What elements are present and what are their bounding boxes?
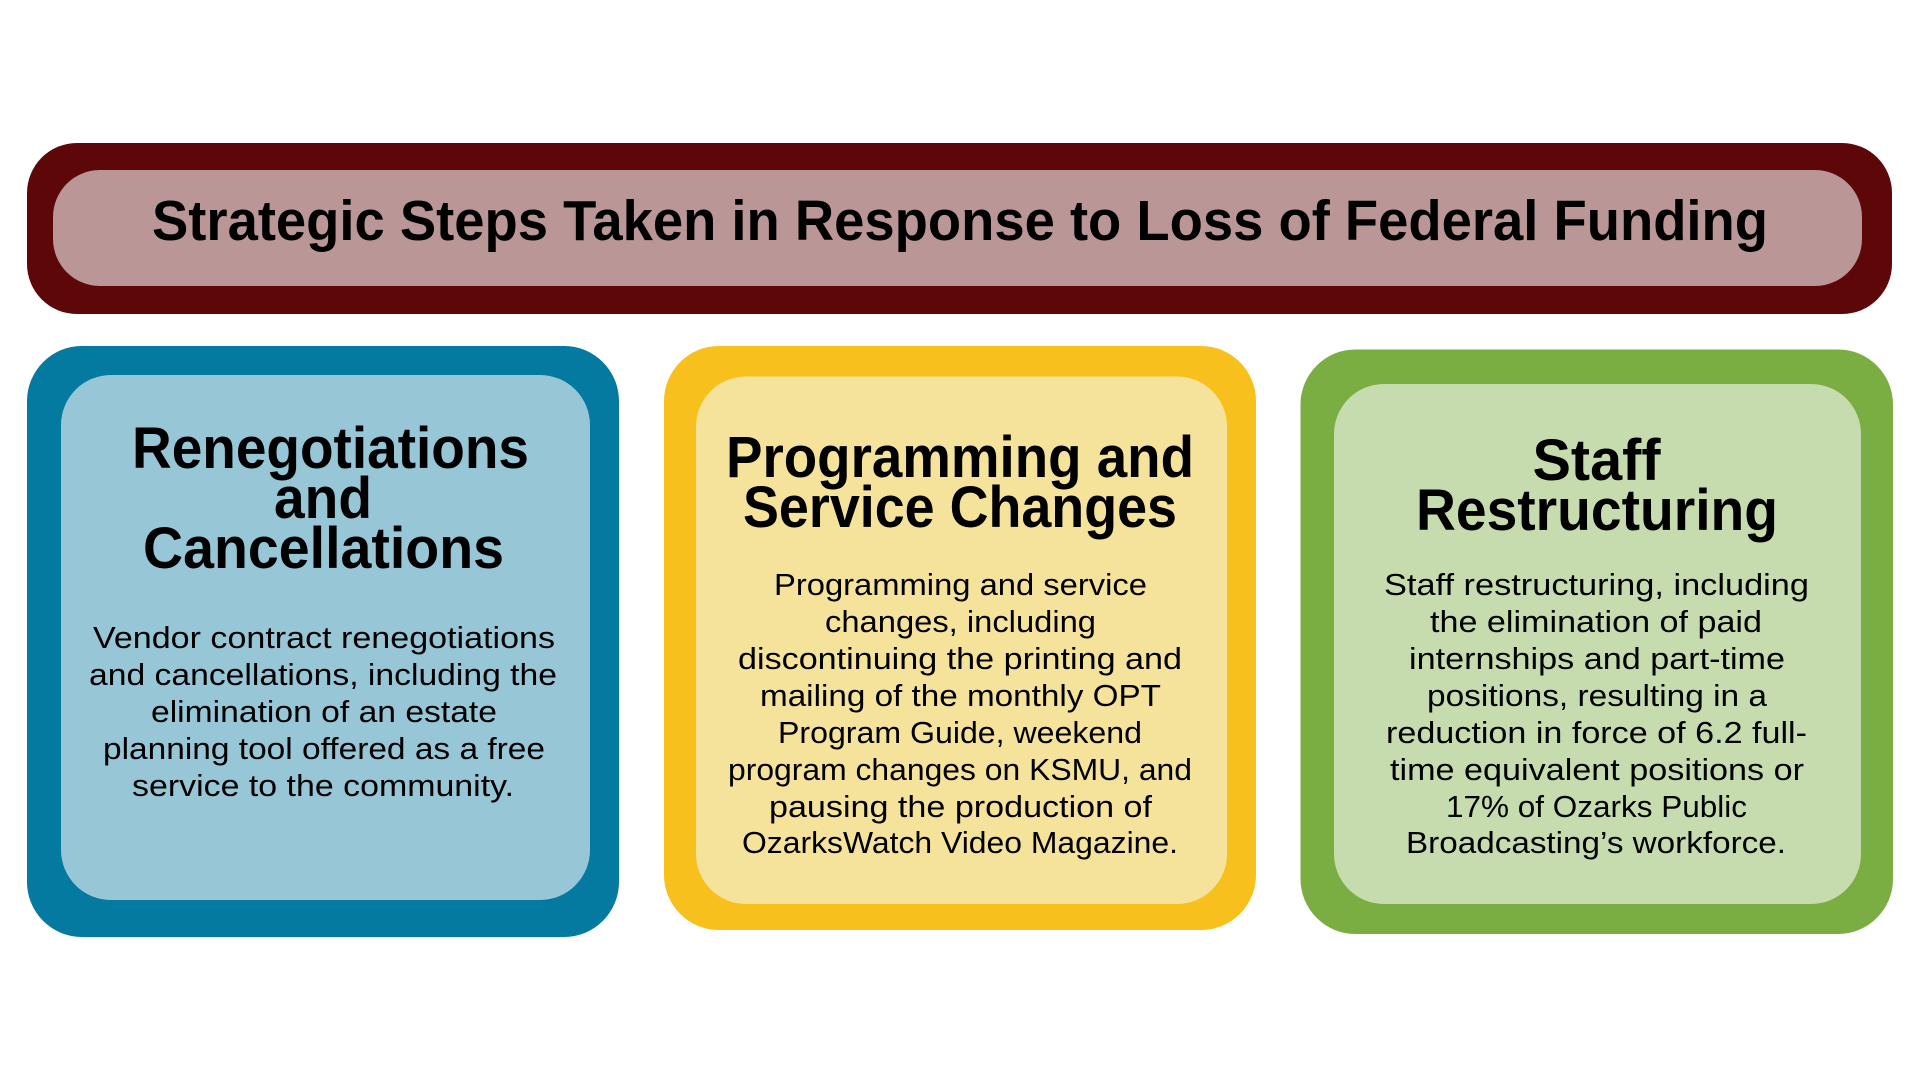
title banner <box>27 143 1892 314</box>
text block: programming changes: Program Guide, weekend <box>778 716 1142 750</box>
text block: staff reductions: Broadcasting’s workforce. <box>1406 826 1786 860</box>
text block: programming changes: Programming and service <box>774 568 1147 602</box>
text block: programming changes: changes, including <box>825 605 1096 639</box>
heading: renegotiations and cancellations <box>132 416 529 581</box>
heading: renegotiations and cancellations: Cancellations <box>143 516 504 581</box>
panel: staff restructuring <box>1300 350 1893 934</box>
heading: staff restructuring: Restructuring <box>1416 478 1778 543</box>
text block: vendor contracts: elimination of an estate <box>151 695 497 729</box>
heading: programming and service changes <box>726 425 1194 540</box>
text block: staff reductions: the elimination of paid <box>1430 605 1762 639</box>
heading: staff restructuring: Staff <box>1532 428 1661 493</box>
text block: vendor contracts: Vendor contract renegotiations <box>93 621 555 655</box>
text block: vendor contracts: service to the community. <box>132 769 514 803</box>
text block: vendor contracts: planning tool offered as a free <box>103 732 545 766</box>
heading: programming and service changes: Service Changes <box>743 475 1177 540</box>
text block: programming changes: mailing of the monthly OPT <box>760 679 1161 713</box>
text block: staff reductions <box>1384 568 1809 860</box>
heading: renegotiations and cancellations: Renegotiations <box>132 416 529 481</box>
text block: programming changes: OzarksWatch Video Magazine. <box>742 826 1178 860</box>
text block: staff reductions: time equivalent positions or <box>1390 753 1804 787</box>
text block: staff reductions: 17% of Ozarks Public <box>1446 790 1747 824</box>
text block: vendor contracts: and cancellations, including the <box>89 658 557 692</box>
text block: programming changes <box>728 568 1192 860</box>
heading: programming and service changes: Programming and <box>726 425 1194 490</box>
panel: programming and service changes <box>664 346 1256 930</box>
title: Strategic Steps Taken in Response to Loss of Federal Funding <box>152 189 1768 253</box>
text block: programming changes: program changes on KSMU, and <box>728 753 1192 787</box>
text block: staff reductions: positions, resulting in a <box>1427 679 1767 713</box>
text block: staff reductions: internships and part-time <box>1409 642 1785 676</box>
text block: staff reductions: Staff restructuring, including <box>1384 568 1809 602</box>
panel: renegotiations and cancellations <box>27 346 619 937</box>
heading: staff restructuring <box>1416 428 1778 543</box>
text block: programming changes: discontinuing the printing and <box>738 642 1182 676</box>
heading: renegotiations and cancellations: and <box>274 466 372 531</box>
text block: staff reductions: reduction in force of 6.2 full- <box>1386 716 1807 750</box>
text block: vendor contracts <box>89 621 557 803</box>
text block: programming changes: pausing the production of <box>769 790 1153 824</box>
